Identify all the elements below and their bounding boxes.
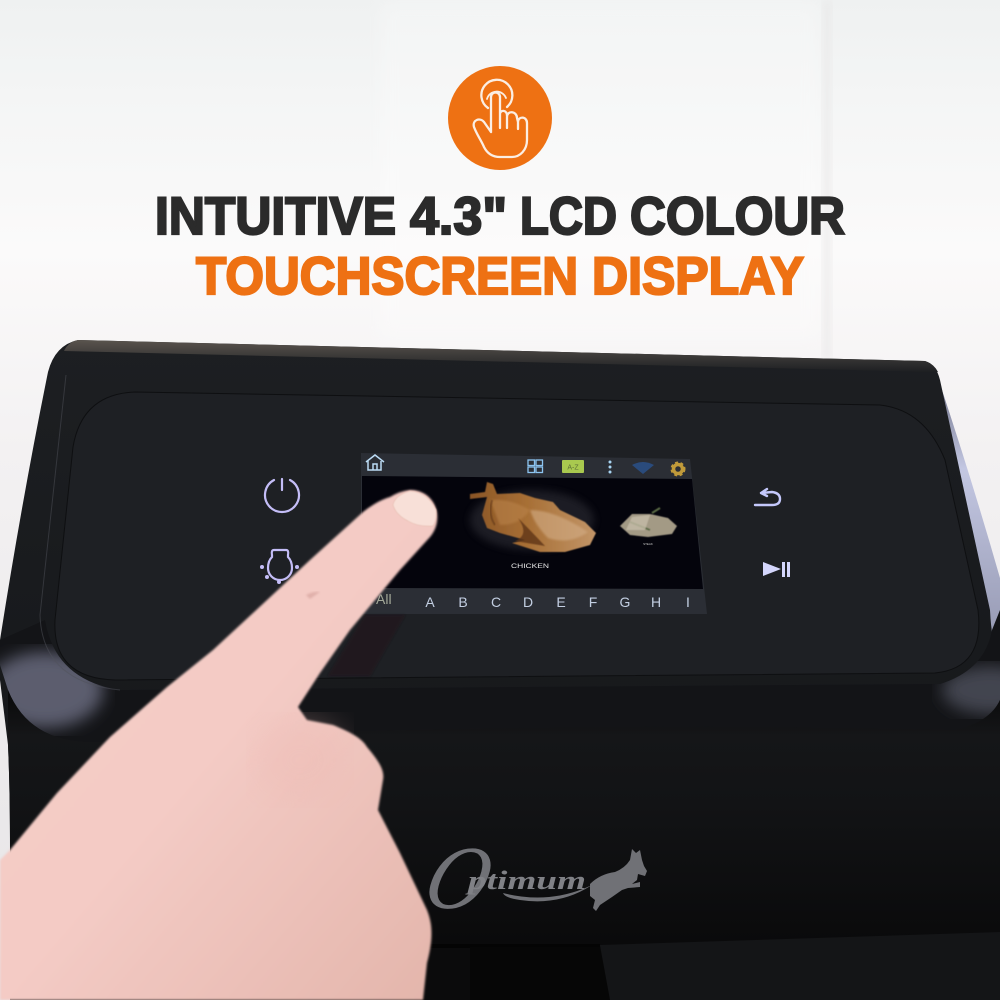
glass control panel [55,392,979,680]
title: line one [155,187,845,246]
lcd touchscreen [361,453,707,614]
hand shading [255,720,345,800]
title: line two: TOUCHSCREEN [196,247,578,306]
alphabet row: E [556,594,566,610]
icon: back button [755,489,780,505]
icon: power button [265,479,299,512]
chicken image [470,482,596,552]
title: line two [196,247,804,306]
alphabet row: H [651,594,661,610]
title: line one: LCD [520,187,617,246]
steak image [620,508,677,537]
alphabet row: A [425,594,435,610]
icon: menu dots [608,460,612,474]
alphabet row [376,591,690,610]
icon: wifi [632,462,654,474]
alphabet row: I [686,594,690,610]
knuckle crease [306,592,320,599]
hand pointing at screen [0,490,437,1000]
title: line one: 4.3" [410,187,507,246]
icon: home [366,455,384,470]
icon: a-z button [562,460,584,473]
title: line two: DISPLAY [592,247,804,306]
alphabet row: F [589,594,597,610]
icon: grid [528,460,542,472]
fingernail [393,491,436,526]
brand logo: ptimum [465,866,586,895]
finger reflection on panel [328,615,405,676]
icon: settings gear [672,462,684,476]
alphabet row: D [523,594,533,610]
icon: light button [260,550,299,584]
icon: tap hand in orange circle [448,66,552,170]
icon: a-z button: A-Z [567,464,579,472]
air fryer body [0,340,1000,1000]
icon: play pause button [763,562,790,577]
alphabet row: All [376,591,392,607]
brand logo [415,827,647,928]
alphabet row: G [620,594,630,610]
brand logo: O [415,827,504,928]
title: line one: COLOUR [630,187,845,246]
chicken label: CHICKEN [511,563,549,570]
alphabet row: C [491,594,501,610]
title: line one: INTUITIVE [155,187,396,246]
alphabet row: B [458,594,468,610]
steak label: STEAK [643,542,653,546]
